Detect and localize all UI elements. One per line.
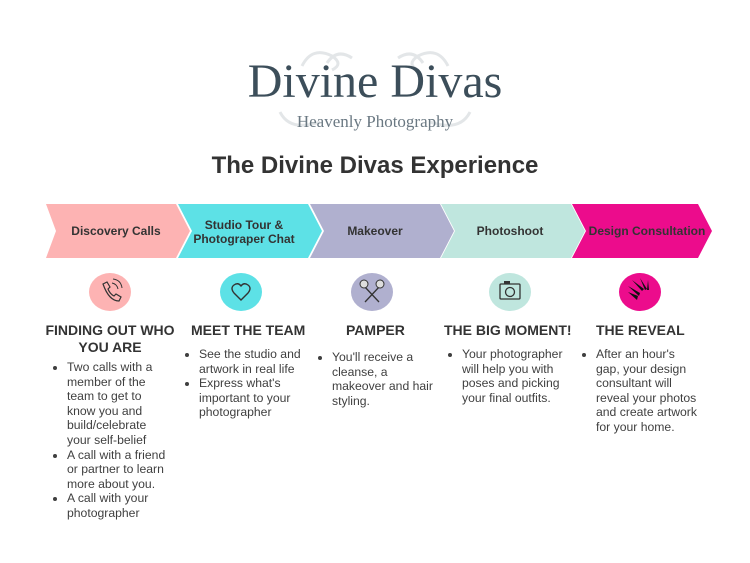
bullets: styling. <box>332 394 370 408</box>
logo <box>248 51 502 131</box>
bullets <box>185 347 301 419</box>
bullets: know you and <box>67 404 142 418</box>
bullets: or partner to learn <box>67 462 164 476</box>
icon: burst <box>619 273 661 311</box>
column 5: the reveal <box>582 322 697 434</box>
bullets <box>318 350 433 408</box>
chevron: Design Consultation <box>572 204 712 258</box>
bullets: After an hour's <box>596 347 675 361</box>
chevron: Makeover <box>310 204 454 258</box>
heading: PAMPER <box>346 322 405 338</box>
bullets: your self-belief <box>67 433 146 447</box>
chevron: Discovery Calls <box>46 204 190 258</box>
bullets: Two calls with a <box>67 360 152 374</box>
bullets: You'll receive a <box>332 350 413 364</box>
icon: phone <box>89 273 131 311</box>
heading: THE REVEAL <box>596 322 685 338</box>
heading: FINDING OUT WHO <box>45 322 175 338</box>
chevron: Photoshoot <box>441 204 585 258</box>
column 3: pamper <box>318 322 433 408</box>
icon: heart <box>220 273 262 311</box>
bullets: will help you with <box>462 362 553 376</box>
bullets: cleanse, a <box>332 365 388 379</box>
logo swirls <box>278 51 472 127</box>
column 2: meet the team <box>185 322 305 419</box>
bullets <box>53 360 165 520</box>
chevron process bar <box>46 204 712 311</box>
logo wordmark: Divine Divas <box>248 55 502 108</box>
heading <box>45 322 175 355</box>
bullets: consultant will <box>596 376 672 390</box>
bullets: A call with your <box>67 491 148 505</box>
icon: brushes <box>351 273 393 311</box>
column 4: the big moment <box>444 322 572 405</box>
chevron: Design Consultation: Design Consultation <box>589 224 705 238</box>
bullets: reveal your photos <box>596 391 696 405</box>
bullets: makeover and hair <box>332 379 433 393</box>
heading: YOU ARE <box>78 339 142 355</box>
title: The Divine Divas Experience <box>212 152 538 179</box>
column 1: finding out who you are <box>45 322 175 520</box>
bullets: for your home. <box>596 420 675 434</box>
bullets <box>582 347 697 434</box>
bullets: artwork in real life <box>199 362 295 376</box>
bullets: poses and picking <box>462 376 560 390</box>
bullets: A call with a friend <box>67 448 165 462</box>
chevron: Studio Tour: Photograper Chat <box>193 232 295 246</box>
chevron: Discovery Calls: Discovery Calls <box>71 224 161 238</box>
chevron: Studio Tour <box>178 204 322 258</box>
chevron: Studio Tour: Studio Tour & <box>205 218 284 232</box>
bullets: photographer <box>199 405 272 419</box>
bullets: photographer <box>67 506 140 520</box>
heading: MEET THE TEAM <box>191 322 305 338</box>
bullets: Express what's <box>199 376 281 390</box>
bullets <box>448 347 563 405</box>
bullets: important to your <box>199 391 290 405</box>
chevron: Makeover: Makeover <box>347 224 403 238</box>
bullets: build/celebrate <box>67 418 146 432</box>
logo tagline: Heavenly Photography <box>297 112 453 131</box>
bullets: more about you. <box>67 477 155 491</box>
bullets: See the studio and <box>199 347 301 361</box>
bullets: member of the <box>67 375 146 389</box>
bullets: and create artwork <box>596 405 697 419</box>
bullets: gap, your design <box>596 362 686 376</box>
heading: THE BIG MOMENT! <box>444 322 572 338</box>
bullets: team to get to <box>67 389 142 403</box>
bullets: your final outfits. <box>462 391 551 405</box>
icon: camera <box>489 273 531 311</box>
chevron: Photoshoot: Photoshoot <box>477 224 543 238</box>
bullets: Your photographer <box>462 347 563 361</box>
